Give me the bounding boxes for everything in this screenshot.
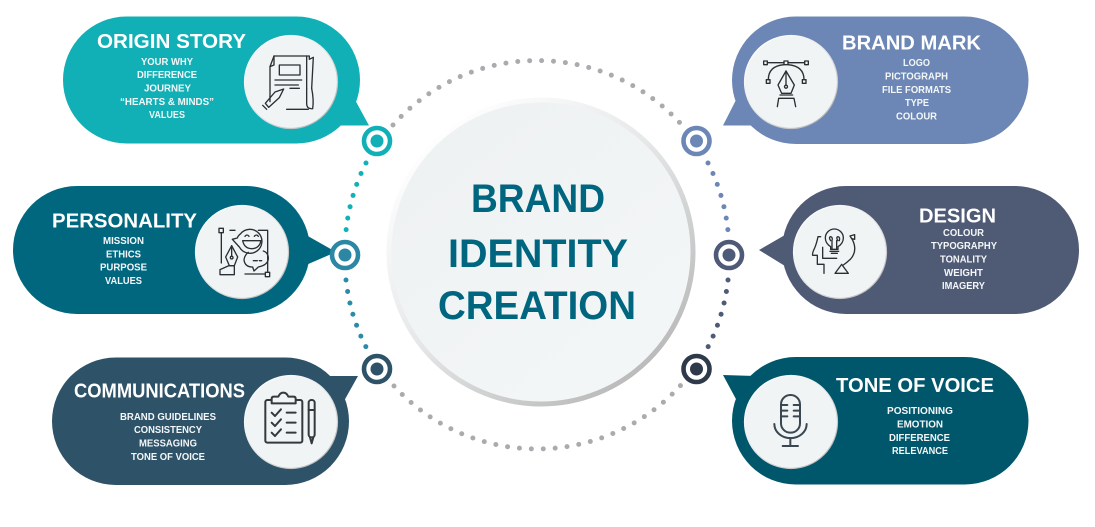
heading: personality: PERSONALITY xyxy=(52,210,197,232)
list: origin story xyxy=(120,57,214,121)
list: brand mark: TYPE xyxy=(905,98,929,109)
list: design xyxy=(931,228,997,292)
list: personality: PURPOSE xyxy=(100,262,147,274)
heading: origin story: ORIGIN STORY xyxy=(97,30,246,53)
list: brand mark: COLOUR xyxy=(896,112,938,122)
list: tone of voice: POSITIONING xyxy=(887,406,953,417)
node: design xyxy=(716,242,742,268)
bubble: design xyxy=(759,186,1079,314)
list: design: WEIGHT xyxy=(944,268,984,279)
list: origin story: DIFFERENCE xyxy=(137,70,197,81)
list: tone of voice xyxy=(887,406,953,457)
list: design: TYPOGRAPHY xyxy=(931,241,997,252)
list: communications: TONE OF VOICE xyxy=(131,452,205,463)
list: communications: MESSAGING xyxy=(139,438,197,450)
central title: CREATION xyxy=(438,284,636,328)
list: design: IMAGERY xyxy=(942,281,985,292)
node: tone of voice xyxy=(684,356,710,382)
bubble: origin story xyxy=(63,16,369,144)
central title: BRAND xyxy=(471,177,605,221)
icon: head with light bulb xyxy=(794,206,886,298)
list: personality xyxy=(100,236,147,287)
bubble: personality xyxy=(13,186,336,314)
central title xyxy=(438,177,636,328)
list: brand mark xyxy=(882,58,951,122)
list: origin story: YOUR WHY xyxy=(141,57,193,68)
bubble: tone of voice xyxy=(723,357,1028,484)
icon: clipboard checklist and pen xyxy=(244,376,338,468)
bubble: brand mark xyxy=(723,16,1028,144)
list: communications: CONSISTENCY xyxy=(134,425,202,436)
list: brand mark: FILE FORMATS xyxy=(882,85,951,96)
panel: brand mark xyxy=(723,16,1028,144)
heading: communications: COMMUNICATIONS xyxy=(74,380,245,402)
list: tone of voice: RELEVANCE xyxy=(892,446,948,457)
icon: microphone xyxy=(744,376,838,468)
icon: smiling speech bubbles and pen xyxy=(196,206,288,298)
list: design: TONALITY xyxy=(940,254,987,266)
bubble: communications xyxy=(52,358,358,485)
list: personality: MISSION xyxy=(103,236,144,247)
list: personality: ETHICS xyxy=(106,250,141,260)
list: brand mark: PICTOGRAPH xyxy=(885,72,948,82)
heading: brand mark: BRAND MARK xyxy=(842,32,981,54)
central title: IDENTITY xyxy=(448,232,628,276)
list: design: COLOUR xyxy=(943,228,985,239)
heading: design: DESIGN xyxy=(919,204,996,228)
dotted ring xyxy=(346,61,728,449)
list: brand mark: LOGO xyxy=(903,58,930,69)
icon: bezier pen tool xyxy=(744,36,838,128)
icon: document and pencil xyxy=(244,36,338,128)
panel: personality xyxy=(13,186,336,314)
panel: communications xyxy=(52,358,358,485)
list: origin story: “HEARTS & MINDS” xyxy=(120,97,214,108)
heading: tone of voice: TONE OF VOICE xyxy=(836,374,994,397)
panel: design xyxy=(759,186,1079,314)
panel: tone of voice xyxy=(723,357,1028,484)
list: communications: BRAND GUIDELINES xyxy=(120,412,216,423)
list: tone of voice: DIFFERENCE xyxy=(889,433,950,444)
list: personality: VALUES xyxy=(105,276,142,287)
node: personality xyxy=(332,242,358,268)
list: origin story: JOURNEY xyxy=(144,84,191,94)
list: origin story: VALUES xyxy=(149,110,185,121)
list: tone of voice: EMOTION xyxy=(897,420,943,430)
node: communications xyxy=(364,356,390,382)
node: brand mark xyxy=(684,128,710,154)
list: communications xyxy=(120,412,216,463)
node: origin story xyxy=(364,128,390,154)
central circle xyxy=(389,100,693,404)
panel: origin story xyxy=(63,16,369,144)
